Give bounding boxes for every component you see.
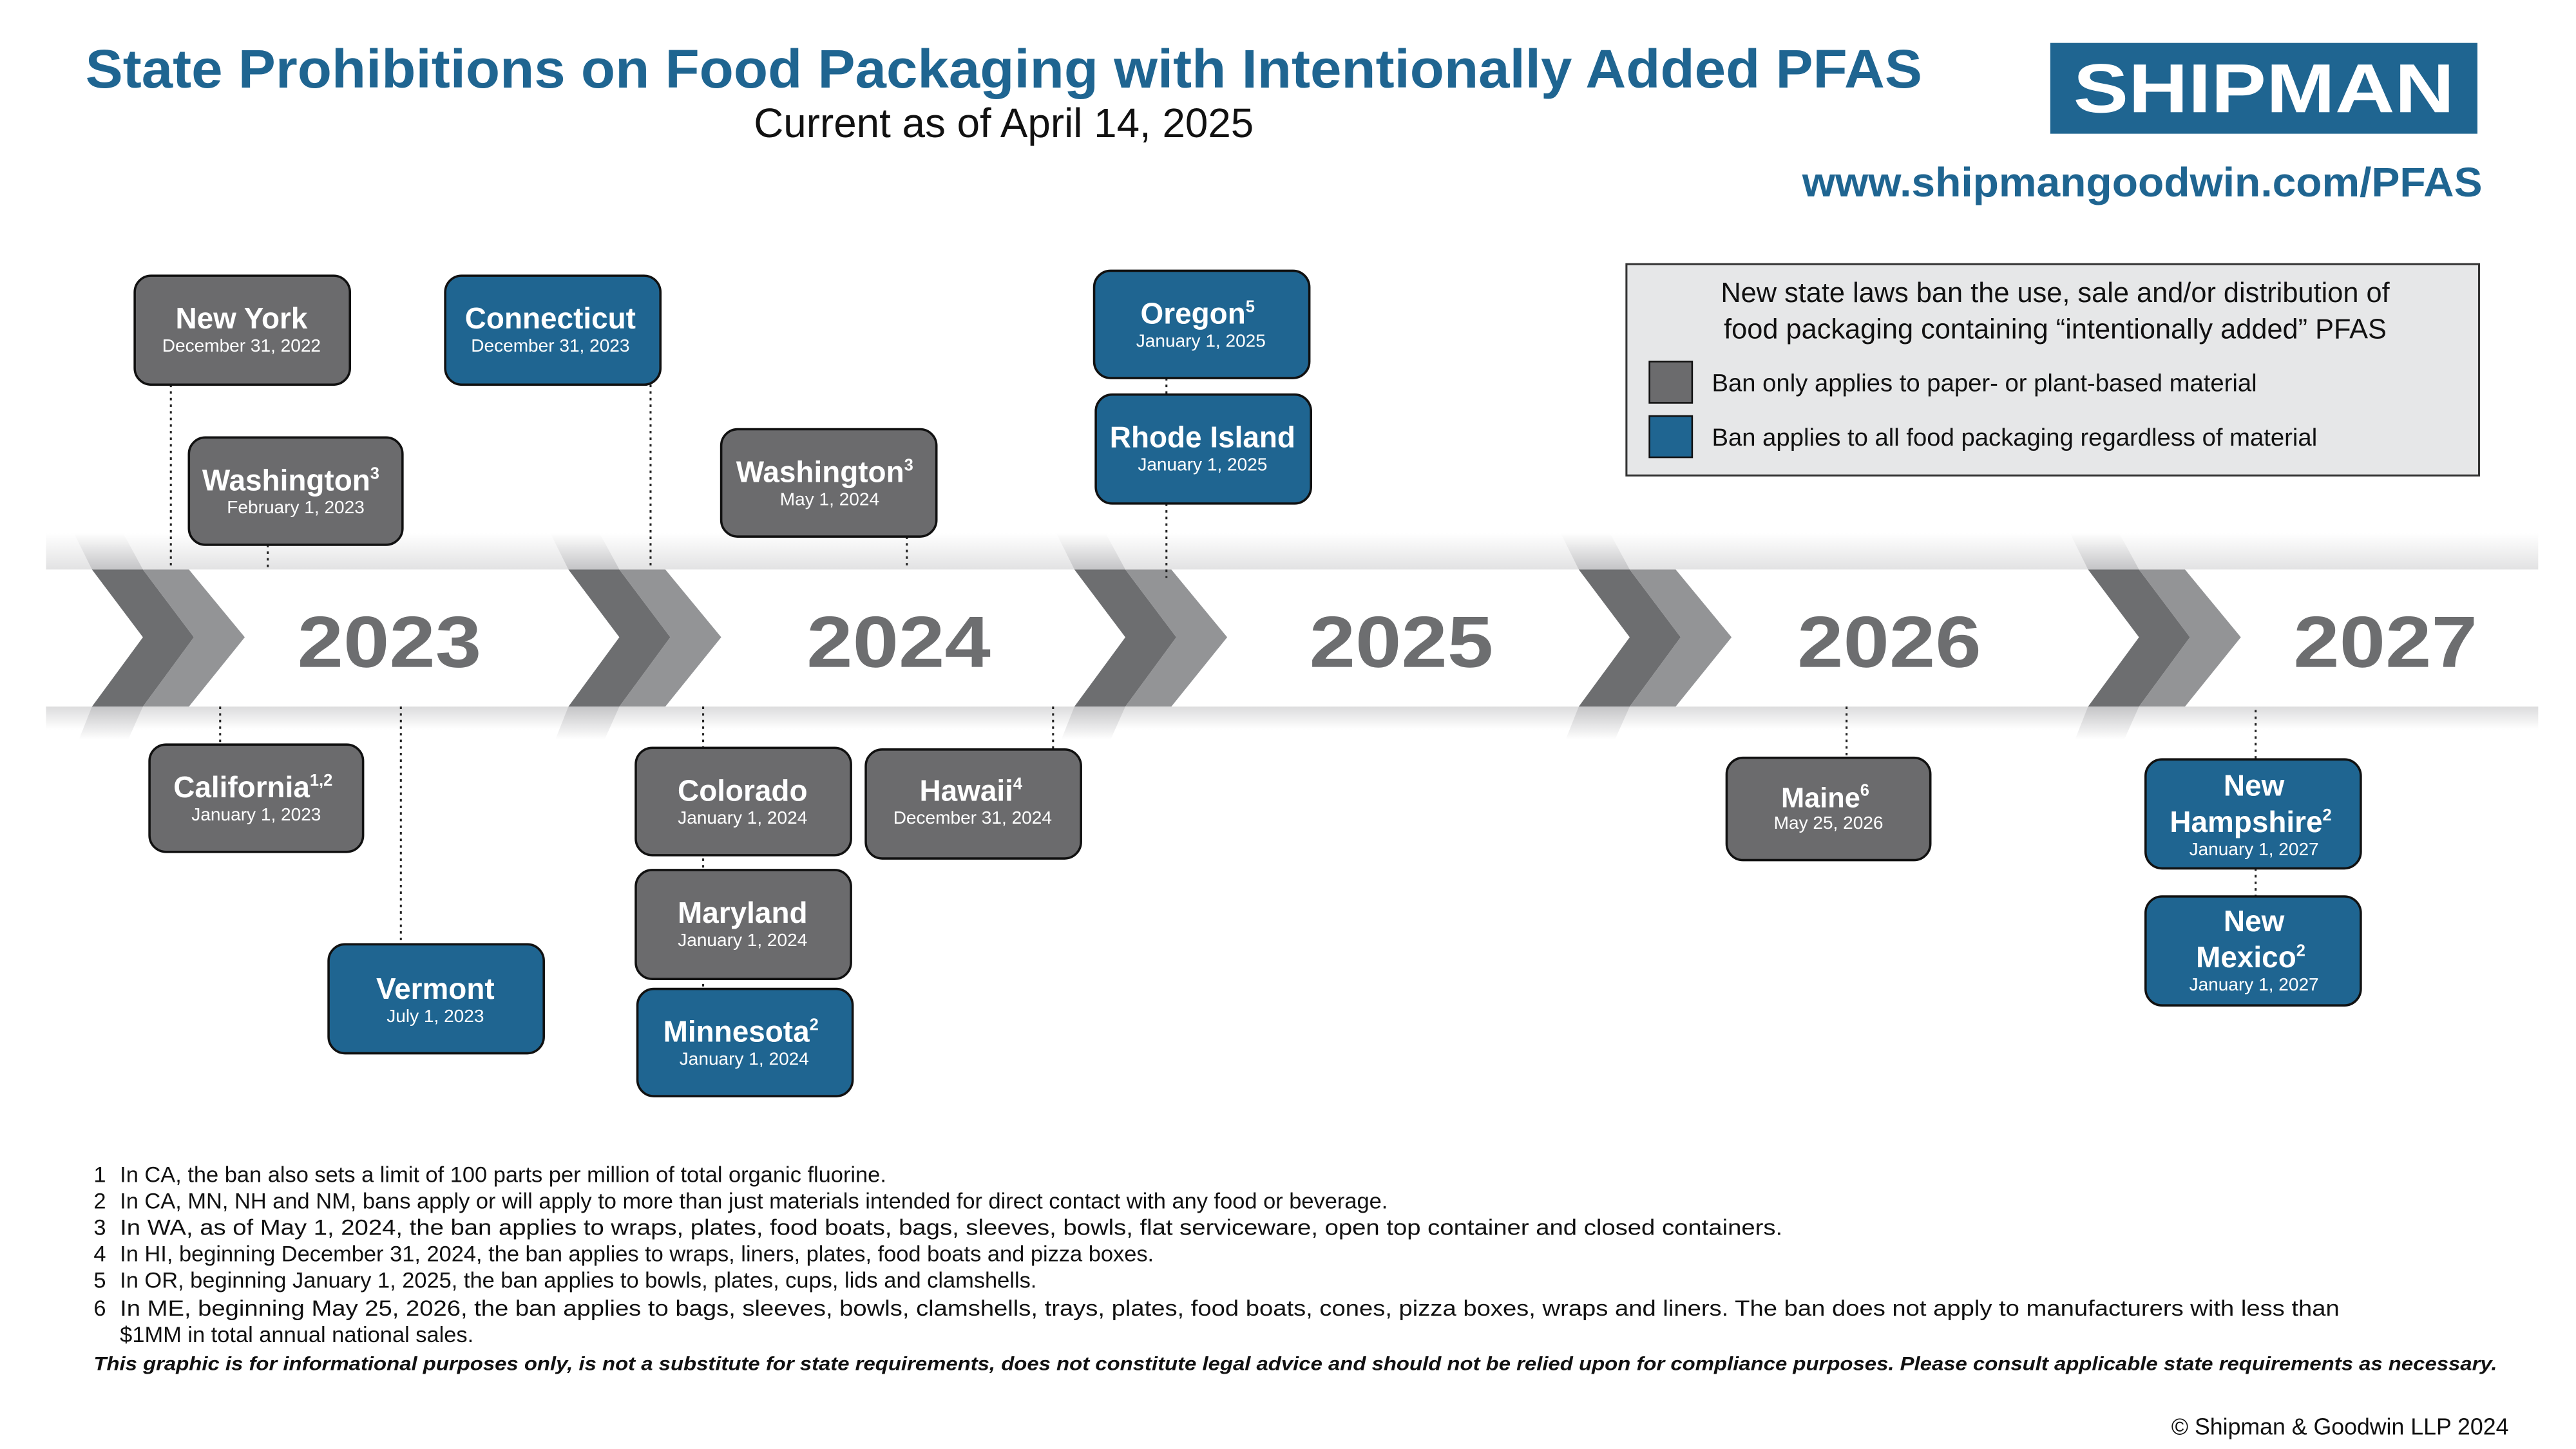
box: Rhode Island: Rhode Island bbox=[1110, 421, 1295, 454]
box: Rhode Island bbox=[1096, 395, 1311, 504]
box: New York: December 31, 2022 bbox=[162, 336, 321, 355]
footnotes bbox=[93, 1162, 2340, 1347]
box: Washington Feb 2023: February 1, 2023 bbox=[227, 497, 365, 517]
box: California: 1,2 bbox=[310, 772, 332, 790]
year labels: 2025 bbox=[1310, 601, 1493, 683]
legend item: all bbox=[1650, 416, 2317, 457]
footnotes: In ME, beginning May 25, 2026, the ban applies to bags, sleeves, bowls, clamshells, trays, plates, food boats, cones, pizza boxes, wraps and liners. The ban does not apply to manufacturers with less than bbox=[120, 1296, 2340, 1321]
box: Washington May 2024: 3 bbox=[904, 457, 913, 475]
box: Connecticut: Connecticut bbox=[465, 301, 636, 335]
footnotes: In CA, the ban also sets a limit of 100 parts per million of total organic fluorine. bbox=[120, 1162, 886, 1187]
box: Colorado: January 1, 2024 bbox=[678, 808, 807, 828]
title: State Prohibitions on Food Packaging with Intentionally Added PFAS bbox=[86, 39, 1922, 99]
box: New Hampshire: New bbox=[2224, 769, 2285, 802]
box: New Mexico: Mexico bbox=[2196, 940, 2296, 974]
box: Minnesota bbox=[638, 989, 853, 1096]
box: New Mexico: January 1, 2027 bbox=[2190, 974, 2319, 994]
box: Washington May 2024: Washington bbox=[736, 455, 904, 489]
legend item: all: Ban applies to all food packaging regardless of material bbox=[1712, 424, 2317, 451]
footnotes: 6 bbox=[93, 1296, 106, 1321]
box: Colorado bbox=[636, 748, 851, 855]
box: Maine: May 25, 2026 bbox=[1774, 813, 1884, 833]
box: Washington Feb 2023 bbox=[189, 437, 403, 545]
box: New Mexico: 2 bbox=[2296, 942, 2305, 960]
box: New Mexico bbox=[2146, 896, 2361, 1005]
box: California: California bbox=[173, 770, 310, 804]
legend item: paper bbox=[1650, 361, 2257, 402]
box: Washington Feb 2023: Washington bbox=[202, 463, 370, 497]
legend bbox=[1627, 264, 2479, 475]
box: Oregon bbox=[1094, 270, 1310, 378]
box: Washington May 2024: May 1, 2024 bbox=[780, 489, 879, 509]
legend: food packaging containing “intentionally added” PFAS bbox=[1724, 314, 2387, 345]
logo: SHIPMAN bbox=[2074, 50, 2454, 127]
legend item: paper: Ban only applies to paper- or plant-based material bbox=[1712, 369, 2257, 397]
box: California bbox=[149, 744, 363, 852]
footnotes: 5 bbox=[93, 1268, 106, 1293]
box: New Hampshire: 2 bbox=[2323, 806, 2332, 824]
year labels bbox=[298, 601, 2477, 683]
state boxes bbox=[135, 270, 2361, 1096]
box: Vermont: Vermont bbox=[376, 972, 495, 1005]
box: Maryland: January 1, 2024 bbox=[678, 930, 807, 950]
box: Hawaii: 4 bbox=[1013, 775, 1023, 793]
footnotes: In WA, as of May 1, 2024, the ban applies to wraps, plates, food boats, bags, sleeves, bowls, flat serviceware, open top container and closed containers. bbox=[120, 1215, 1782, 1240]
box: Vermont bbox=[329, 944, 544, 1054]
timeline band bbox=[46, 533, 2538, 739]
url: www.shipmangoodwin.com/PFAS bbox=[1802, 159, 2483, 205]
box: Washington Feb 2023: 3 bbox=[370, 464, 379, 482]
copyright: © Shipman & Goodwin LLP 2024 bbox=[2171, 1414, 2508, 1440]
box: New Mexico: New bbox=[2224, 904, 2285, 938]
box: Vermont: July 1, 2023 bbox=[386, 1006, 484, 1026]
box: Rhode Island: January 1, 2025 bbox=[1138, 455, 1267, 475]
subtitle: Current as of April 14, 2025 bbox=[754, 100, 1254, 146]
box: Washington May 2024 bbox=[721, 430, 937, 536]
box: New York: New York bbox=[175, 301, 308, 335]
footnotes: 3 bbox=[93, 1215, 106, 1240]
footnotes: In HI, beginning December 31, 2024, the ban applies to wraps, liners, plates, food boats and pizza boxes. bbox=[120, 1242, 1154, 1267]
box: Oregon: January 1, 2025 bbox=[1136, 330, 1266, 350]
box: Hawaii: December 31, 2024 bbox=[893, 808, 1052, 828]
box: Minnesota: Minnesota bbox=[663, 1014, 810, 1048]
footnotes: $1MM in total annual national sales. bbox=[120, 1323, 473, 1347]
box: Hawaii: Hawaii bbox=[919, 773, 1013, 807]
connector lines bbox=[171, 378, 2256, 989]
box: New Hampshire bbox=[2146, 759, 2361, 868]
box: Maine: Maine bbox=[1781, 782, 1860, 814]
box: Maine: 6 bbox=[1860, 782, 1869, 800]
box: Connecticut: December 31, 2023 bbox=[471, 336, 630, 355]
year labels: 2024 bbox=[806, 601, 991, 683]
footnotes: 1 bbox=[93, 1162, 106, 1187]
footnotes: In OR, beginning January 1, 2025, the ban applies to bowls, plates, cups, lids and clamshells. bbox=[120, 1268, 1036, 1293]
year labels: 2026 bbox=[1797, 601, 1981, 683]
footnotes: 2 bbox=[93, 1189, 106, 1214]
box: New Hampshire: Hampshire bbox=[2170, 805, 2323, 838]
box: Connecticut bbox=[445, 276, 660, 384]
box: New Hampshire: January 1, 2027 bbox=[2190, 839, 2319, 859]
box: Colorado: Colorado bbox=[678, 773, 807, 807]
year labels: 2027 bbox=[2293, 601, 2477, 683]
box: Minnesota: 2 bbox=[810, 1016, 819, 1034]
box: Minnesota: January 1, 2024 bbox=[680, 1048, 809, 1068]
footnotes: In CA, MN, NH and NM, bans apply or will apply to more than just materials intended for direct contact with any food or beverage. bbox=[120, 1189, 1388, 1214]
box: Maine bbox=[1726, 758, 1931, 860]
box: Hawaii bbox=[866, 750, 1081, 858]
year labels: 2023 bbox=[298, 601, 481, 683]
box: New York bbox=[135, 276, 350, 384]
box: Maryland bbox=[636, 870, 851, 979]
footnotes: 4 bbox=[93, 1242, 106, 1267]
legend: New state laws ban the use, sale and/or distribution of bbox=[1721, 278, 2390, 308]
box: California: January 1, 2023 bbox=[191, 804, 321, 824]
box: Oregon: Oregon bbox=[1141, 296, 1246, 330]
logo bbox=[2050, 43, 2477, 134]
disclaimer: This graphic is for informational purposes only, is not a substitute for state requirements, does not constitute legal advice and should not be relied upon for compliance purposes. Please consult applicable state requirements as necessary. bbox=[93, 1354, 2497, 1375]
box: Maryland: Maryland bbox=[678, 896, 808, 929]
box: Oregon: 5 bbox=[1246, 298, 1255, 316]
